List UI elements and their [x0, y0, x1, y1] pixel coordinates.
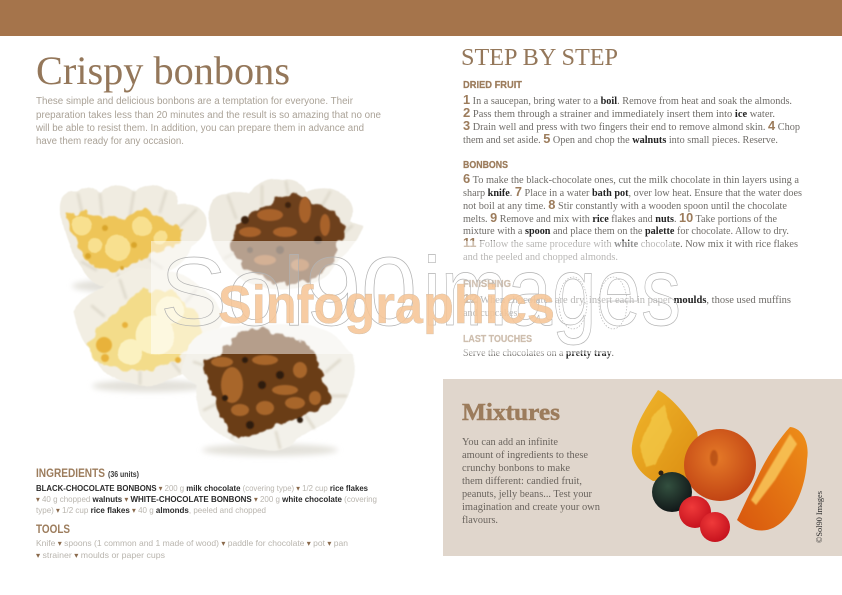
last touches [463, 333, 614, 359]
last touches heading: LAST TOUCHES [463, 333, 532, 345]
intro text: will be able to resist them. In addition, you can prepare them in advance and [35, 123, 364, 134]
dried fruit text: 2 Pass them through a strainer and immediately insert them into ice water. [463, 106, 775, 120]
finishing text: 12 When chocolates are dry, insert each in paper moulds, those used muffins [463, 292, 791, 306]
mixtures text: them different: candied fruit, [462, 476, 582, 487]
photo: four bonbons in paper cups [60, 179, 364, 456]
intro text: have them ready for any occasion. [36, 136, 184, 147]
bonbons text: not boil at any time. 8 Stir constantly with a wooden spoon until the chocolate [463, 198, 788, 212]
cup: white chocolate top [60, 184, 206, 290]
mixtures text: crunchy bonbons to make [462, 463, 571, 474]
header band [0, 0, 842, 36]
mixtures heading: Mixtures [462, 400, 560, 426]
bonbons text: sharp knife. 7 Place in a water bath pot, over low heat. Ensure that the water does [463, 185, 802, 199]
bonbons heading: BONBONS [463, 159, 508, 171]
finishing heading: FINISHING [463, 278, 511, 290]
ingredients heading: INGREDIENTS [36, 468, 105, 480]
bonbons text: melts. 9 Remove and mix with rice flakes and nuts. 10 Take portions of the [463, 211, 778, 225]
dried fruit text: them and set aside. 5 Open and chop the walnuts into small pieces. Reserve. [463, 132, 778, 146]
finishing steps [463, 278, 791, 319]
tools list [36, 538, 348, 560]
bonbons text: and the peeled and chopped almonds. [463, 252, 618, 263]
mixtures text [462, 437, 600, 526]
cup: white chocolate bottom [73, 268, 225, 386]
photo credit: ©Sol90 Images [814, 491, 824, 543]
bonbons text: 6 To make the black-chocolate ones, cut the milk chocolate in thin layers using a [463, 172, 800, 186]
bonbons steps [463, 159, 802, 263]
dried fruit steps [463, 79, 800, 146]
icon: candied fruit photo [632, 390, 808, 542]
ingredients list [36, 483, 377, 515]
cup: dark chocolate top [208, 179, 364, 290]
step by step heading: STEP BY STEP [461, 45, 618, 71]
mixtures text: peanuts, jelly beans... Test your [462, 489, 593, 500]
cup shadows [72, 279, 338, 456]
intro text: These simple and delicious bonbons are a temptation for everyone. Their [36, 96, 354, 107]
dried fruit text: 1 In a saucepan, bring water to a boil. Remove from heat and soak the almonds. [463, 93, 792, 107]
bonbons text: mixture with a spoon and place them on the palette for chocolate. Allow to dry. [463, 226, 789, 237]
panel: mixtures [443, 379, 842, 556]
watermark: Sol90 [160, 237, 417, 346]
cup: dark chocolate bottom [182, 324, 354, 451]
last touches text: Serve the chocolates on a pretty tray. [463, 348, 614, 359]
ingredients list: BLACK-CHOCOLATE BONBONS ▾ 200 g milk chocolate (covering type) ▾ 1/2 cup rice flakes [36, 483, 368, 493]
watermark: Sinfographics [218, 275, 555, 335]
mixtures text: amount of ingredients to these [462, 450, 589, 461]
tools list: ▾ strainer ▾ moulds or paper cups [36, 550, 165, 560]
mixtures text: imagination and create your own [462, 502, 600, 513]
tools list: Knife ▾ spoons (1 common and 1 made of wood) ▾ paddle for chocolate ▾ pot ▾ pan [36, 538, 348, 548]
dried fruit text [463, 93, 800, 146]
finishing text: and cupcakes. [463, 308, 520, 319]
units note: (36 units) [108, 470, 139, 479]
ingredients list: ▾ 40 g chopped walnuts ▾ WHITE-CHOCOLATE BONBONS ▾ 200 g white chocolate (covering [36, 494, 377, 504]
finishing text [463, 292, 791, 319]
watermark: images [423, 237, 681, 346]
ingredients section [36, 468, 377, 515]
dried fruit text: 3 Drain well and press with two fingers their end to remove almond skin. 4 Chop [463, 119, 800, 133]
intro text [35, 96, 381, 147]
mixtures text: You can add an infinite [462, 437, 559, 448]
watermark [151, 237, 681, 354]
title: Crispy bonbons [36, 48, 290, 93]
ingredients list: type) ▾ 1/2 cup rice flakes ▾ 40 g almonds, peeled and chopped [36, 505, 266, 515]
tools heading: TOOLS [36, 524, 70, 536]
dried fruit heading: DRIED FRUIT [463, 79, 523, 91]
intro text: preparation takes less than 20 minutes and the result is so amazing that no one [36, 110, 381, 121]
bonbons text [463, 172, 802, 263]
bonbons text: 11 Follow the same procedure with white chocolate. Now mix it with rice flakes [463, 236, 798, 250]
tools section [36, 524, 348, 560]
mixtures text: flavours. [462, 515, 498, 526]
